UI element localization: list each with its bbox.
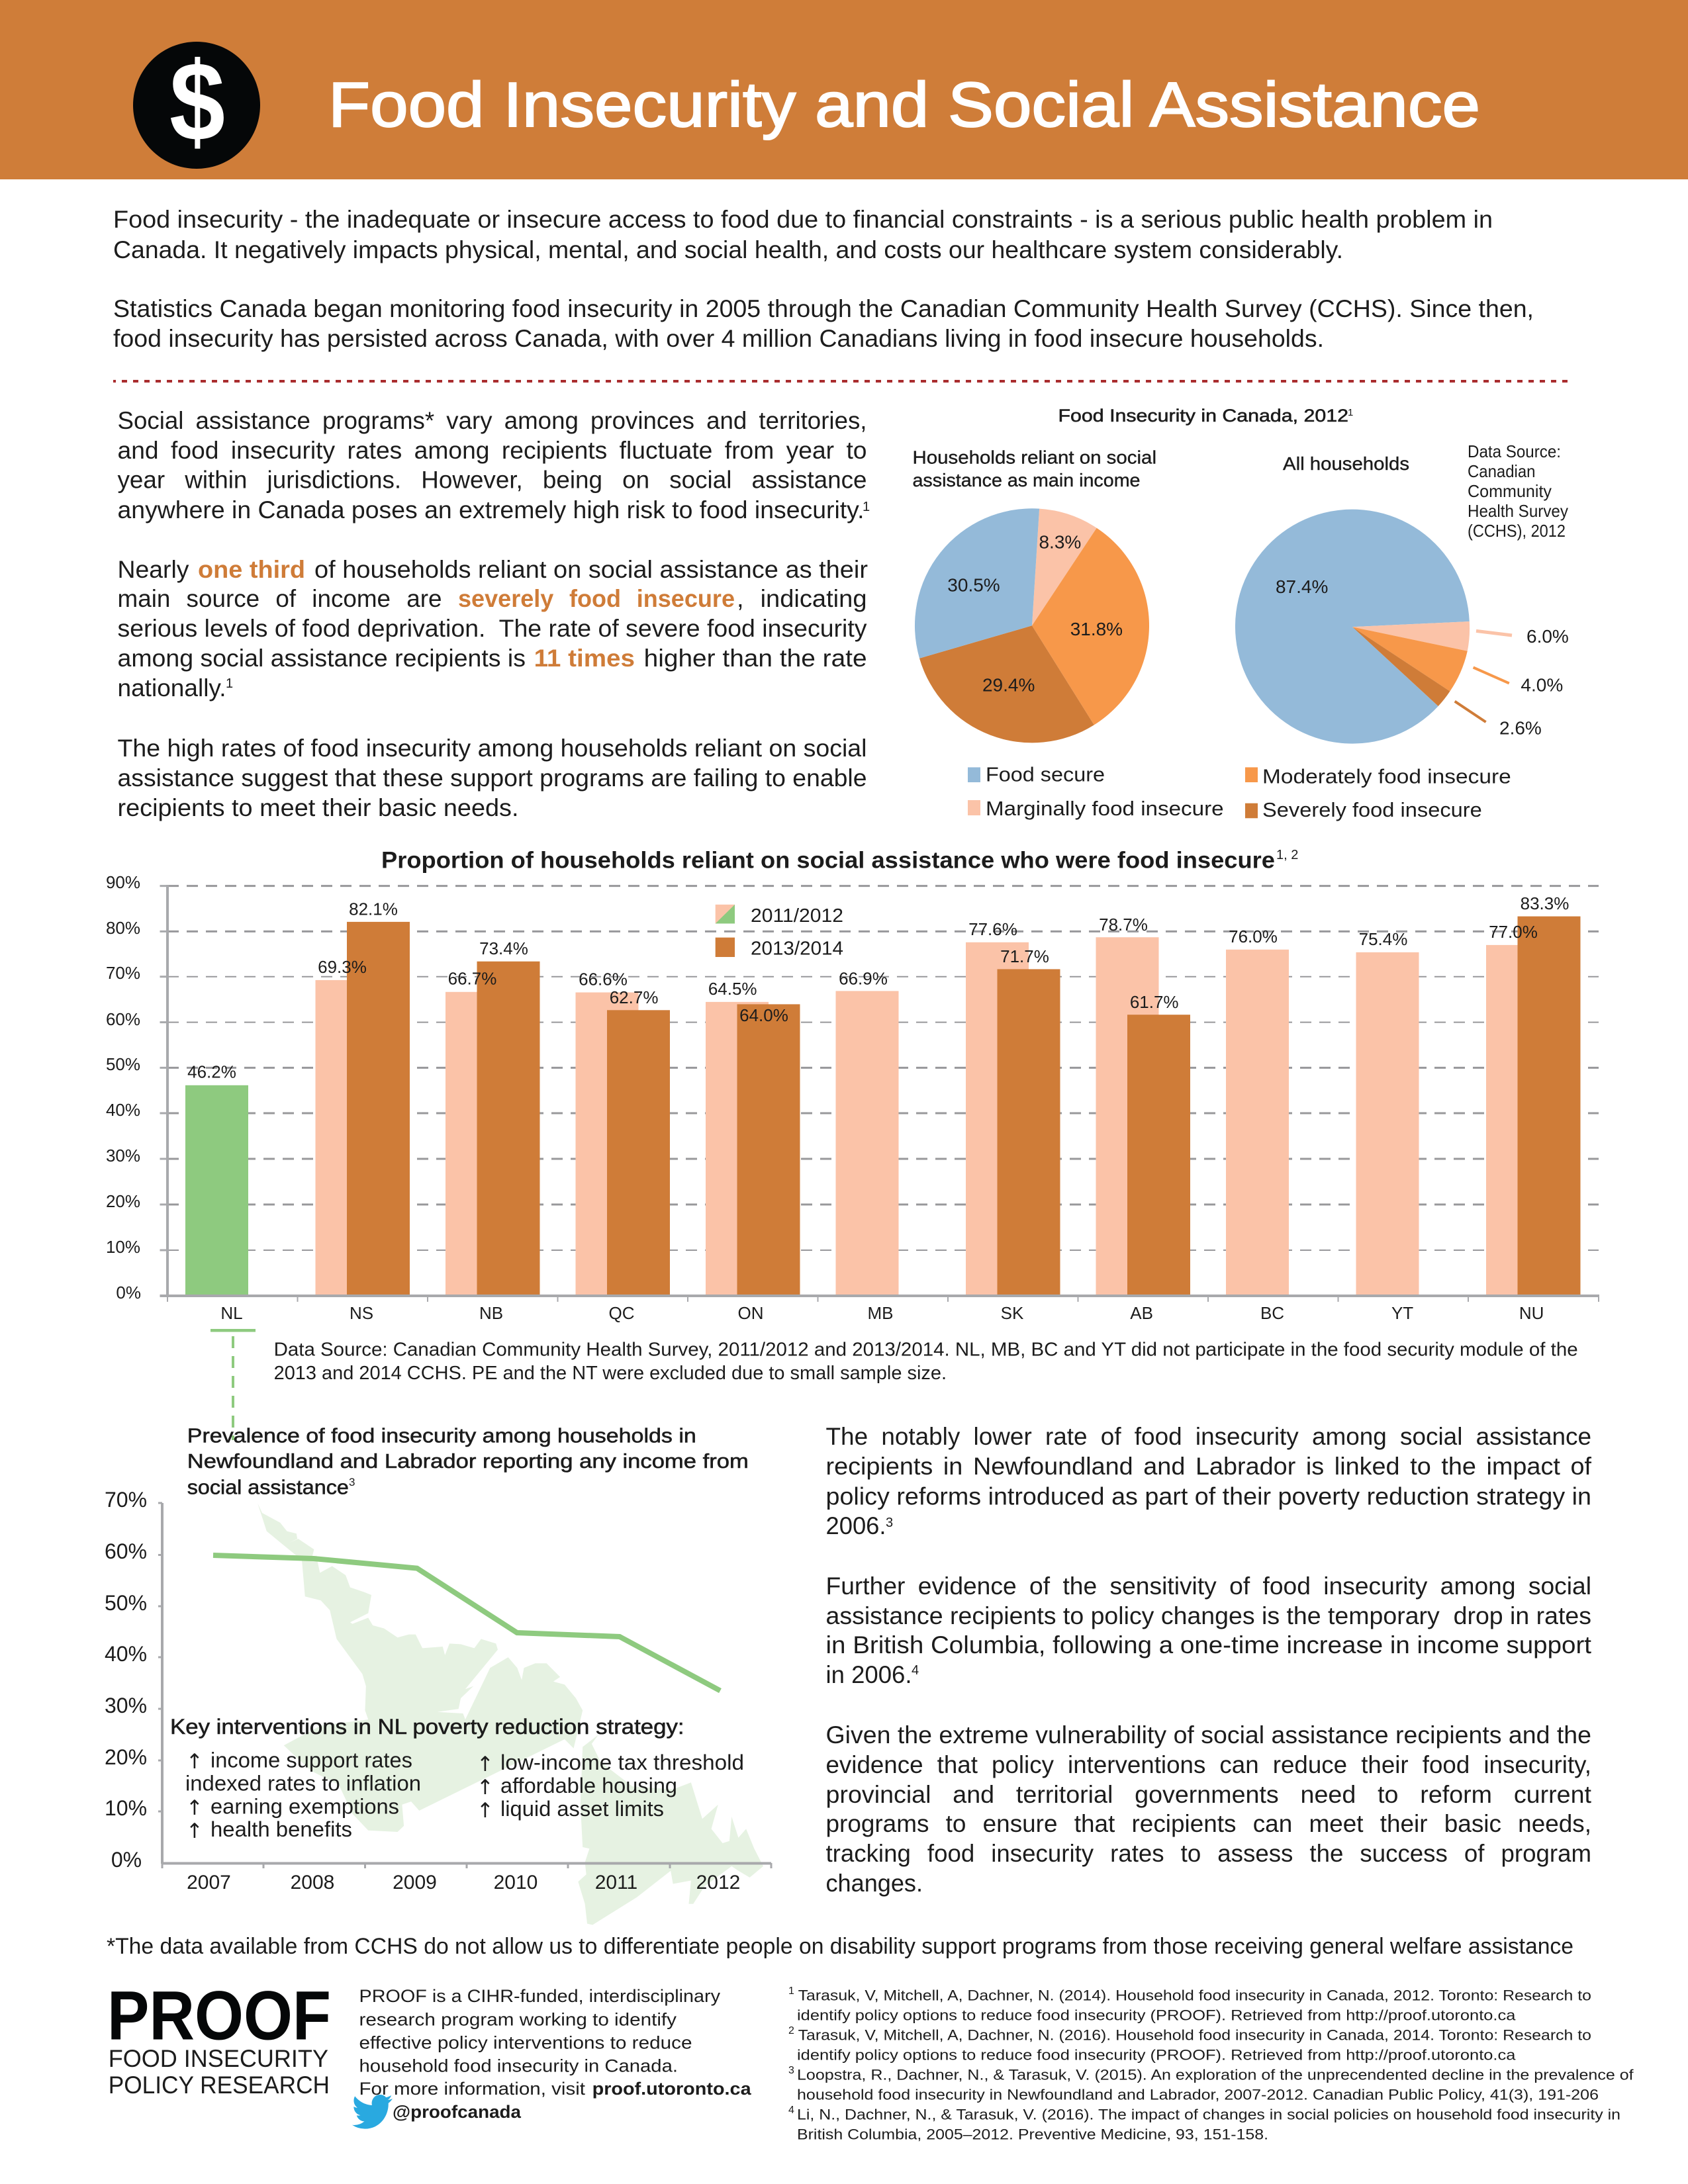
callout: key interventions: ↑ [186,1796,203,1820]
pie chart: households reliant on social assistance: 8.3% [1039,532,1081,552]
value labels: 62.7% [610,987,658,1007]
intro text: food insecurity has persisted across Canada, with over 4 million Canadians living in food insecure households. [113,325,1324,352]
y axis labels: 70% [106,963,140,983]
pie chart: households reliant on social assistance [915,508,1149,743]
data source note: Canadian [1468,461,1536,481]
value labels: 46.2% [187,1062,236,1082]
value labels: 71.7% [1000,946,1049,966]
callout: key interventions: health benefits [211,1817,352,1841]
text block: social assistance programs: 1 [226,676,233,691]
value labels: 66.9% [839,969,888,989]
map: Newfoundland and Labrador [258,1503,763,1925]
text block: about PROOF [359,1986,752,2122]
data source note: (CCHS), 2012 [1468,521,1566,541]
pie chart: all households: 6.0% [1526,626,1569,647]
callout: key interventions: ↑ [477,1776,494,1799]
references: Li, N., Dachner, N., & Tarasuk, V. (2016). The impact of changes in social policies on household food insecurity in [797,2107,1620,2123]
bars [185,917,1581,1296]
callout: key interventions: income support rates [211,1749,412,1772]
value labels: 77.0% [1489,922,1538,942]
category labels: ON [737,1303,764,1323]
logo: PROOF: POLICY RESEARCH [109,2071,330,2099]
pie chart: households reliant on social assistance: 31.8% [1070,619,1123,639]
value labels: 69.3% [318,957,367,977]
value labels: 61.7% [1130,992,1179,1012]
pie label: households reliant on social assistance [912,447,1156,490]
bar legend: 2011/2012 [751,905,843,927]
text block: policy reforms: The notably lower rate of food insecurity among social assistance [826,1423,1591,1450]
line chart y labels: 0% [111,1848,142,1872]
intro text: Canada. It negatively impacts physical, mental, and social health, and costs our healthcare system considerably. [113,236,1343,263]
logo: PROOF [107,1978,331,2099]
callout: key interventions: indexed rates to inflation [185,1771,421,1795]
text block: policy reforms: policy reforms introduced as part of their poverty reduction strategy in [826,1482,1591,1510]
category labels: NB [479,1303,503,1323]
pie label: households reliant on social assistance: Households reliant on social [912,447,1156,468]
pie legend: Food secure [986,763,1105,786]
line chart y labels: 60% [105,1539,147,1563]
data source note: Data Source: [1468,441,1561,461]
intro text: Statistics Canada began monitoring food insecurity in 2005 through the Canadian Community Health Survey (CCHS). Since then, [113,295,1534,322]
pie section heading: Food Insecurity in Canada, 2012 [1058,406,1348,426]
pie legend [968,763,1511,821]
text block: social assistance programs [118,407,870,821]
line chart x labels: 2007 [187,1872,231,1893]
callout: key interventions [170,1715,744,1843]
header banner [0,0,1688,179]
text block: policy reforms: 3 [886,1516,893,1530]
text block: about PROOF: PROOF is a CIHR-funded, interdisciplinary [359,1986,721,2006]
references: Tarasuk, V, Mitchell, A, Dachner, N. (2016). Household food insecurity in Canada, 2014. Toronto: Research to [798,2027,1591,2044]
title: Food Insecurity and Social Assistance [328,69,1480,140]
text block: policy reforms: in British Columbia, following a one-time increase in income support [826,1631,1592,1659]
callout: key interventions: low-income tax threshold [500,1751,744,1774]
callout: key interventions: liquid asset limits [500,1797,664,1821]
text block: social assistance programs: severely food insecure [458,585,735,612]
pie label: all households: All households [1283,453,1409,474]
references: identify policy options to reduce food insecurity (PROOF). Retrieved from http://proof.utoronto.ca [797,2047,1516,2064]
data source note [1468,441,1568,541]
pie chart: all households: 4.0% [1521,675,1563,695]
pie chart: all households: 87.4% [1276,576,1328,597]
callout: key interventions: ↑ [186,1819,203,1843]
text block: about PROOF: For more information, visit [359,2079,586,2099]
pie legend: Marginally food insecure [986,797,1224,820]
callout: key interventions: ↑ [186,1750,203,1774]
text block: about PROOF: research program working to identify [359,2010,677,2030]
line chart x labels: 2012 [696,1872,740,1893]
line chart heading [187,1424,749,1499]
y axis labels: 20% [106,1191,140,1211]
category labels: BC [1260,1303,1284,1323]
text block: policy reforms: Further evidence of the sensitivity of food insecurity among social [826,1572,1591,1600]
references: British Columbia, 2005–2012. Preventive Medicine, 93, 151-158. [797,2126,1268,2143]
pie chart: households reliant on social assistance: 29.4% [982,675,1035,695]
text block: social assistance programs: assistance suggest that these support programs are failing to enable [118,764,867,792]
line chart x labels: 2010 [494,1872,538,1893]
references: 3 [788,2065,794,2076]
callout: key interventions: earning exemptions [211,1795,399,1819]
intro text: Food insecurity - the inadequate or insecure access to food due to financial constraints - is a serious public health problem in [113,206,1493,233]
line chart heading: Prevalence of food insecurity among households in [187,1424,696,1447]
data source note: Community [1468,481,1552,501]
value labels: 64.0% [739,1005,788,1025]
text block: policy reforms: evidence that policy interventions can reduce their food insecurity, [826,1751,1591,1778]
y axis labels: 10% [106,1237,140,1257]
bar legend: 2013/2014 [751,938,843,960]
value labels: 75.4% [1359,929,1407,949]
line chart heading: social assistance [187,1476,349,1499]
text block: social assistance programs: anywhere in Canada poses an extremely high risk to food insecurity. [118,496,865,523]
icon: dollar sign [133,39,260,169]
category labels: MB [867,1303,894,1323]
category labels: YT [1391,1303,1413,1323]
text block: policy reforms [826,1423,1592,1897]
pie chart: all households [1235,510,1569,744]
value labels [187,893,1569,1082]
text block: policy reforms: recipients in Newfoundland and Labrador is linked to the impact of [826,1453,1592,1480]
y axis labels: 0% [116,1283,141,1302]
y axis labels: 90% [106,872,140,892]
category labels [220,1303,1544,1323]
text block: social assistance programs: 1 [863,500,870,514]
text block: social assistance programs: of households reliant on social assistance as their [314,556,868,583]
bar chart data source note: Data Source: Canadian Community Health Survey, 2011/2012 and 2013/2014. NL, MB, BC and YT did not participate in the food security module of the [274,1340,1578,1361]
y axis labels: 40% [106,1100,140,1120]
y axis labels: 30% [106,1146,140,1165]
text block: policy reforms: 4 [912,1663,919,1678]
pie chart: all households: 2.6% [1499,718,1542,739]
value labels: 83.3% [1521,893,1569,913]
line chart y labels [105,1488,147,1872]
intro text [113,206,1534,352]
text block: social assistance programs: The high rates of food insecurity among households reliant on social [118,735,867,762]
pie chart: households reliant on social assistance: 30.5% [947,575,1000,596]
line chart heading: 3 [349,1476,355,1488]
references: 2 [788,2025,794,2036]
text block: policy reforms: tracking food insecurity rates to assess the success of program [826,1840,1591,1867]
text block: social assistance programs: , indicating [737,585,867,612]
bar chart data source note: 2013 and 2014 CCHS. PE and the NT were excluded due to small sample size. [274,1363,947,1384]
value labels: 82.1% [349,899,398,919]
text block: policy reforms: changes. [826,1870,923,1897]
bar legend [716,905,843,960]
line chart y labels: 20% [105,1745,147,1769]
text block: policy reforms: Given the extreme vulnerability of social assistance recipients and the [826,1721,1591,1749]
line chart x labels: 2008 [291,1872,334,1893]
bar chart data source note [274,1340,1578,1384]
value labels: 78.7% [1099,915,1148,934]
line chart y labels: 10% [105,1796,147,1820]
callout: key interventions: Key interventions in NL poverty reduction strategy: [170,1715,684,1739]
line chart x labels: 2011 [595,1872,637,1893]
category labels: NL [220,1303,243,1323]
line chart y labels: 70% [105,1488,147,1512]
value labels: 76.0% [1229,927,1278,946]
value labels: 66.6% [579,970,628,989]
references: Loopstra, R., Dachner, N., & Tarasuk, V. (2015). An exploration of the unprecendented decline in the prevalence of [797,2067,1634,2083]
text block: social assistance programs: higher than the rate [644,645,867,672]
bar chart: households reliant on social assistance who were food insecure [106,872,1599,1323]
y axis labels: 80% [106,918,140,938]
footnote: data caveat: *The data available from CCHS do not allow us to differentiate people on disability support programs from those receiving general welfare assistance [107,1934,1573,1959]
panel: Newfoundland and Labrador line chart [105,1424,771,1925]
text block: social assistance programs: among social assistance recipients is [118,645,526,672]
line chart y labels: 50% [105,1591,147,1615]
value labels: 66.7% [448,969,496,989]
bar chart heading: 1, 2 [1276,848,1298,862]
references: Tarasuk, V, Mitchell, A, Dachner, N. (2014). Household food insecurity in Canada, 2012. Toronto: Research to [798,1987,1591,2004]
pie legend: Moderately food insecure [1262,764,1511,788]
value labels: 73.4% [479,938,528,958]
text block: social assistance programs: serious levels of food deprivation. The rate of severe food insecurity [118,615,867,642]
text block: about PROOF: proof.utoronto.ca [592,2079,752,2099]
callout: key interventions: ↑ [477,1752,494,1776]
value labels: 64.5% [708,979,757,999]
text block: social assistance programs: Nearly [118,556,189,583]
line chart y labels: 40% [105,1642,147,1666]
category labels: QC [609,1303,634,1323]
text block: policy reforms: in 2006. [826,1661,912,1688]
y axis labels: 50% [106,1054,140,1074]
bar chart heading: Proportion of households reliant on social assistance who were food insecure [381,847,1275,874]
references [788,1985,1634,2143]
pie legend: Severely food insecure [1262,798,1482,821]
text block: social assistance programs: one third [198,556,305,583]
callout: key interventions: ↑ [477,1799,494,1823]
value labels: 77.6% [968,919,1017,939]
logo: PROOF: FOOD INSECURITY [109,2045,328,2072]
text block: policy reforms: provincial and territorial governments need to reform current [826,1781,1592,1808]
y axis labels [106,872,141,1302]
references: 1 [788,1985,794,1997]
pie section heading: 1 [1348,407,1353,418]
references: household food insecurity in Newfoundland and Labrador, 2007-2012. Canadian Public Policy, 41(3), 191-206 [797,2087,1599,2103]
text block: policy reforms: 2006. [826,1512,886,1539]
text block: about PROOF: household food insecurity in Canada. [359,2056,678,2076]
y axis labels: 60% [106,1009,140,1029]
icon: twitter bird [352,2095,393,2129]
text block: social assistance programs: nationally. [118,674,226,702]
icon: dollar sign: $ [169,39,225,165]
data source note: Health Survey [1468,501,1568,521]
axes [160,885,1599,1302]
text block: policy reforms: programs to ensure that recipients can meet their basic needs, [826,1810,1591,1837]
category labels: SK [1001,1303,1024,1323]
text block: social assistance programs: 11 times [534,645,635,672]
line chart x labels [187,1872,740,1893]
category labels: AB [1130,1303,1153,1323]
line chart axes [158,1503,771,1868]
panel: pie charts [912,406,1569,821]
line series [213,1555,720,1691]
line chart y labels: 30% [105,1694,147,1717]
logo: PROOF: PROOF [107,1978,331,2055]
line chart x labels: 2009 [393,1872,437,1893]
text block: social assistance programs: and food insecurity rates among recipients fluctuate from year to [118,437,867,464]
line chart heading: Newfoundland and Labrador reporting any income from [187,1449,749,1473]
references: identify policy options to reduce food insecurity (PROOF). Retrieved from http://proof.utoronto.ca [797,2007,1516,2024]
callout: key interventions: affordable housing [500,1774,677,1797]
text block: social assistance programs: main source of income are [118,585,442,612]
text block: policy reforms: assistance recipients to policy changes is the temporary drop in rates [826,1602,1591,1629]
pie label: households reliant on social assistance: assistance as main income [912,470,1140,490]
text block: social assistance programs: year within jurisdictions. However, being on social assistance [118,466,867,494]
category labels: NS [350,1303,373,1323]
text block: about PROOF: @proofcanada [393,2102,522,2122]
text block: about PROOF: effective policy interventions to reduce [359,2033,692,2053]
text block: social assistance programs: recipients to meet their basic needs. [118,794,519,821]
connector: NL bar to line chart [211,1329,256,1440]
references: 4 [788,2105,794,2116]
text block: social assistance programs: Social assistance programs* vary among provinces and territories, [118,407,867,434]
category labels: NU [1519,1303,1544,1323]
